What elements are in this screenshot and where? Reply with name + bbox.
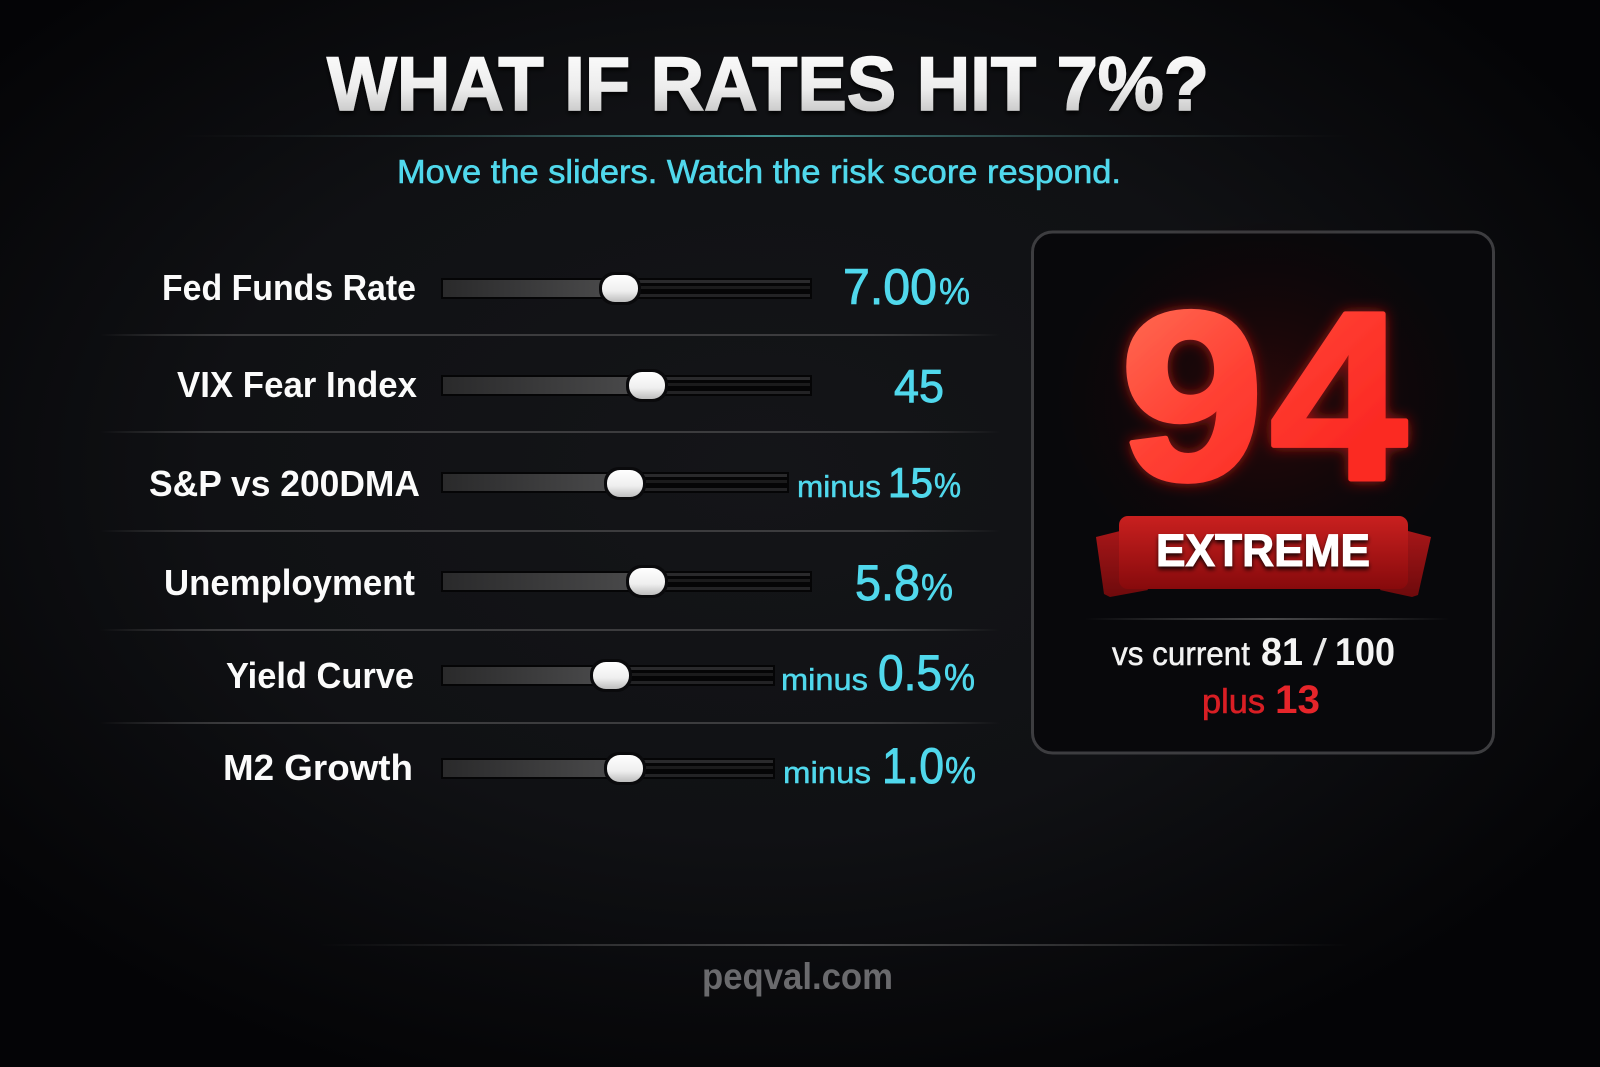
subtitle: Move the sliders. Watch the risk score respond. (397, 153, 1121, 190)
value: 1.0 (882, 738, 944, 794)
panel: slider controls (100, 259, 1000, 794)
big score number (1120, 262, 1407, 530)
comparison to current: 100 (1335, 631, 1395, 674)
value: % (945, 750, 976, 792)
value: % (944, 657, 975, 699)
value: 5.8 (855, 555, 920, 611)
slider (441, 752, 775, 785)
score change: plus (1202, 683, 1265, 721)
score change: 13 (1275, 678, 1320, 722)
value: 0.5 (878, 645, 942, 701)
value: % (939, 271, 970, 313)
slider (441, 369, 812, 402)
panel: risk score card (1032, 210, 1494, 753)
comparison to current: / (1313, 632, 1328, 673)
row: Yield Curve (226, 645, 975, 701)
value (783, 738, 976, 794)
value: minus (797, 469, 881, 504)
value: % (934, 467, 961, 505)
big score number: 9 (1120, 262, 1264, 530)
label: Fed Funds Rate (162, 267, 416, 308)
value: 45 (894, 360, 944, 412)
row: Unemployment (164, 555, 953, 611)
label: Yield Curve (226, 655, 414, 696)
slider (441, 659, 775, 692)
value: % (921, 567, 953, 609)
row: S&P vs 200DMA (149, 459, 961, 506)
label: S&P vs 200DMA (149, 463, 420, 504)
value: minus (781, 662, 868, 697)
label: Unemployment (164, 562, 415, 603)
comparison to current: 81 (1261, 631, 1303, 674)
slider (441, 565, 812, 598)
value: minus (783, 755, 871, 790)
score change (1202, 678, 1320, 722)
value: 15 (888, 459, 933, 506)
row: M2 Growth (223, 738, 976, 794)
title: WHAT IF RATES HIT 7%? (327, 42, 1209, 127)
value (797, 459, 961, 506)
footer site name: peqval.com (702, 956, 893, 997)
severity ribbon: EXTREME (1156, 525, 1370, 576)
comparison to current (1112, 631, 1395, 674)
row: Fed Funds Rate (162, 259, 970, 315)
slider (441, 467, 789, 500)
comparison to current: vs current (1112, 635, 1250, 672)
slider (441, 272, 812, 305)
big score number: 4 (1270, 262, 1407, 530)
label: VIX Fear Index (177, 364, 417, 405)
label: M2 Growth (223, 747, 413, 788)
row: VIX Fear Index (177, 360, 944, 412)
value (781, 645, 975, 701)
severity ribbon (1096, 516, 1431, 597)
value: 7.00 (843, 259, 937, 315)
